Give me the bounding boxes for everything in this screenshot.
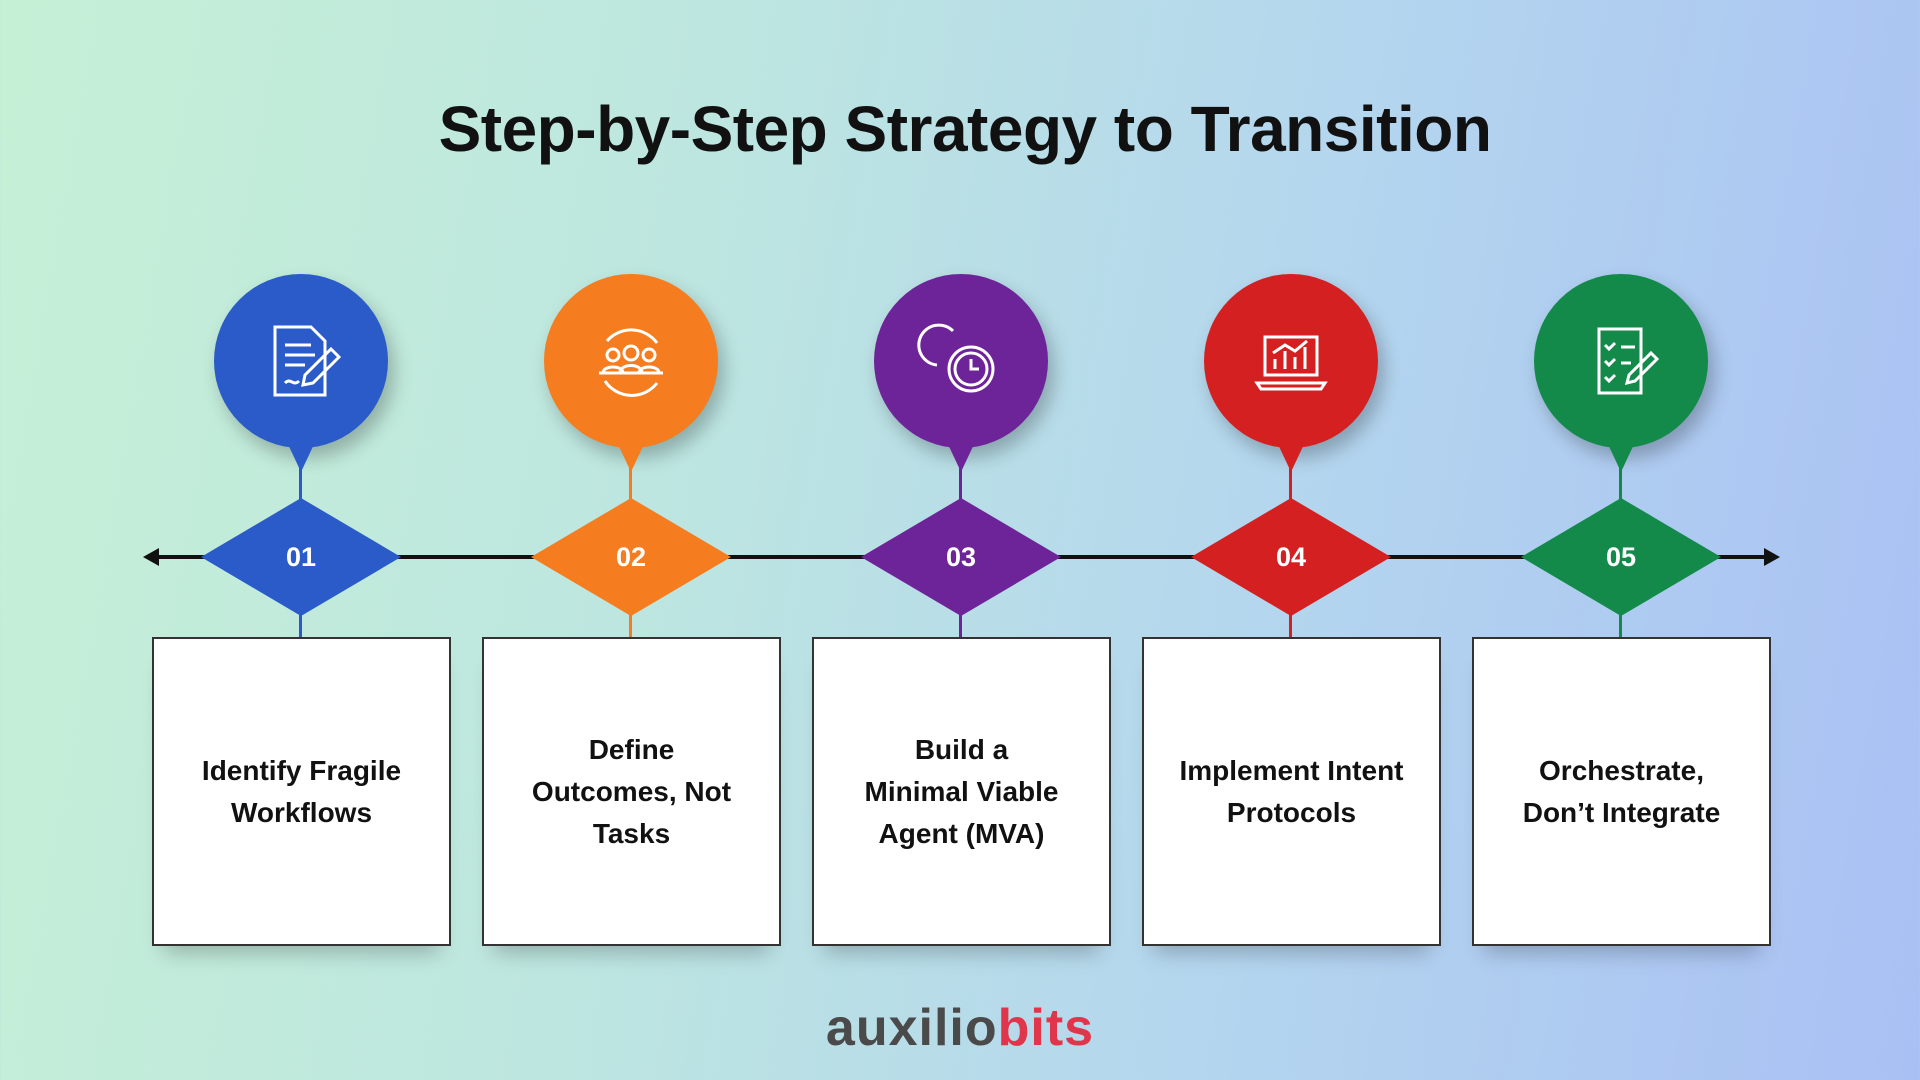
diamond 01: 01 (286, 542, 316, 572)
step 01 (152, 274, 451, 964)
box 03: Minimal Viable (864, 776, 1058, 806)
box 01 (152, 637, 451, 946)
diamond 02 (531, 498, 731, 616)
box 03: Build a (915, 734, 1008, 764)
box 03 (812, 637, 1111, 946)
icon: checklist (1598, 328, 1659, 394)
icon: document pen (274, 326, 341, 396)
diamond 04: 04 (1276, 542, 1306, 572)
title: Step-by-Step Strategy to Transition (439, 93, 1491, 165)
step 04 (1142, 274, 1441, 964)
arrow left (143, 548, 159, 566)
box 01: Identify Fragile (202, 754, 401, 786)
diamond 04 (1191, 498, 1391, 616)
step 03 (812, 274, 1111, 964)
box 05: Orchestrate, (1539, 754, 1704, 786)
box 02 (482, 637, 781, 946)
box 03: Agent (MVA) (879, 818, 1044, 848)
box 04: Protocols (1227, 796, 1356, 828)
step 05 (1472, 274, 1771, 964)
icon: laptop chart (1254, 336, 1328, 390)
box 02: Tasks (593, 818, 670, 848)
diamond 03: 03 (946, 542, 976, 572)
diamond 02: 02 (616, 542, 646, 572)
logo: auxiliobits (826, 999, 1094, 1057)
diamond 01 (201, 498, 401, 616)
diamond 05 (1521, 498, 1721, 616)
icon: team cycle (599, 328, 663, 397)
diamond 03 (861, 498, 1061, 616)
diamond 05: 05 (1606, 542, 1636, 572)
arrow right (1764, 548, 1780, 566)
box 02: Outcomes, Not (532, 776, 731, 806)
box 04 (1142, 637, 1441, 946)
icon: gear clock (917, 324, 994, 392)
box 04: Implement Intent (1179, 754, 1404, 786)
box 01: Workflows (231, 796, 372, 828)
box 05 (1472, 637, 1771, 946)
box 02: Define (589, 734, 674, 764)
box 05: Don’t Integrate (1523, 796, 1720, 828)
step 02 (482, 274, 781, 964)
timeline line (150, 555, 1775, 559)
